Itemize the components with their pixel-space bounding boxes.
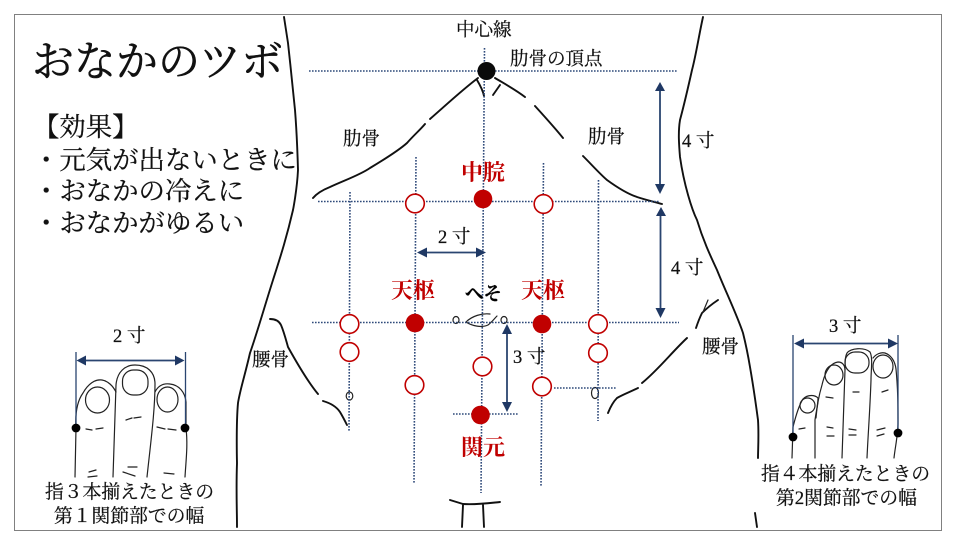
effects list: 【効果】	[33, 112, 139, 142]
guide lines	[309, 48, 679, 493]
label: right hip bone: 腰骨	[702, 337, 739, 358]
label: 関元: 関元	[461, 435, 505, 460]
arrow: 3 sun	[794, 338, 898, 348]
label: rib apex: 肋骨の頂点	[510, 49, 603, 70]
knuckle creases	[799, 390, 888, 436]
point: 関元	[471, 406, 490, 424]
point: 中脘	[474, 190, 492, 208]
label: navel: へそ	[465, 285, 502, 305]
acupoint markers	[340, 62, 607, 424]
label: 4 sun lower: 4 寸	[671, 258, 703, 279]
torso line drawing	[237, 17, 758, 527]
label: 中脘: 中脘	[461, 160, 505, 185]
fingers	[75, 365, 187, 477]
title: おなかのツボ	[32, 40, 283, 86]
effects list: ・おなかがゆるい	[33, 208, 244, 238]
caption: three fingers: 指３本揃えたときの	[45, 481, 214, 503]
label: center line: 中心線	[456, 20, 512, 41]
caption: three fingers	[45, 481, 214, 527]
label: right rib: 肋骨	[588, 127, 625, 148]
point: left 天枢	[406, 314, 424, 332]
measurement arrow: 4 sun upper	[655, 82, 665, 194]
measurement arrow: 3 sun	[502, 324, 512, 412]
measurement arrow: 4 sun lower	[656, 207, 666, 318]
fingernails	[800, 352, 893, 413]
label: right 天枢: 天枢	[521, 278, 565, 303]
caption: four fingers: 指４本揃えたときの	[761, 463, 930, 485]
ribs	[313, 78, 662, 204]
fingernails	[86, 370, 178, 413]
label: 3 sun center: 3 寸	[513, 347, 545, 368]
label: left rib: 肋骨	[343, 129, 380, 150]
label: 2 sun hand: 2 寸	[113, 326, 145, 347]
measure dots	[72, 424, 189, 432]
caption: four fingers: 第2関節部での幅	[776, 487, 917, 509]
label: left 天枢: 天枢	[391, 278, 435, 303]
width span lines	[76, 352, 186, 428]
label: 2 sun center: 2 寸	[438, 227, 470, 248]
effects list: ・おなかの冷えに	[33, 176, 244, 206]
width span lines	[793, 335, 898, 437]
navel and small body marks	[346, 314, 598, 527]
three finger hand	[72, 352, 189, 477]
effects list	[33, 112, 297, 238]
effects list: ・元気が出ないときに	[33, 145, 297, 175]
measure dots	[789, 429, 902, 441]
arrow: 2 sun	[76, 356, 184, 366]
point: right 天枢	[533, 315, 551, 333]
fingers	[792, 349, 898, 458]
hip bones	[270, 300, 718, 425]
caption: four fingers	[761, 463, 930, 509]
four finger hand	[789, 335, 902, 458]
label: left hip bone: 腰骨	[252, 350, 289, 371]
caption: three fingers: 第１関節部での幅	[54, 505, 204, 527]
label: 4 sun upper: 4 寸	[682, 131, 714, 152]
measurement arrow: 2 sun	[417, 248, 486, 258]
point: rib apex	[478, 62, 496, 80]
knuckle creases	[86, 417, 176, 477]
label: 3 sun hand: 3 寸	[829, 316, 861, 337]
